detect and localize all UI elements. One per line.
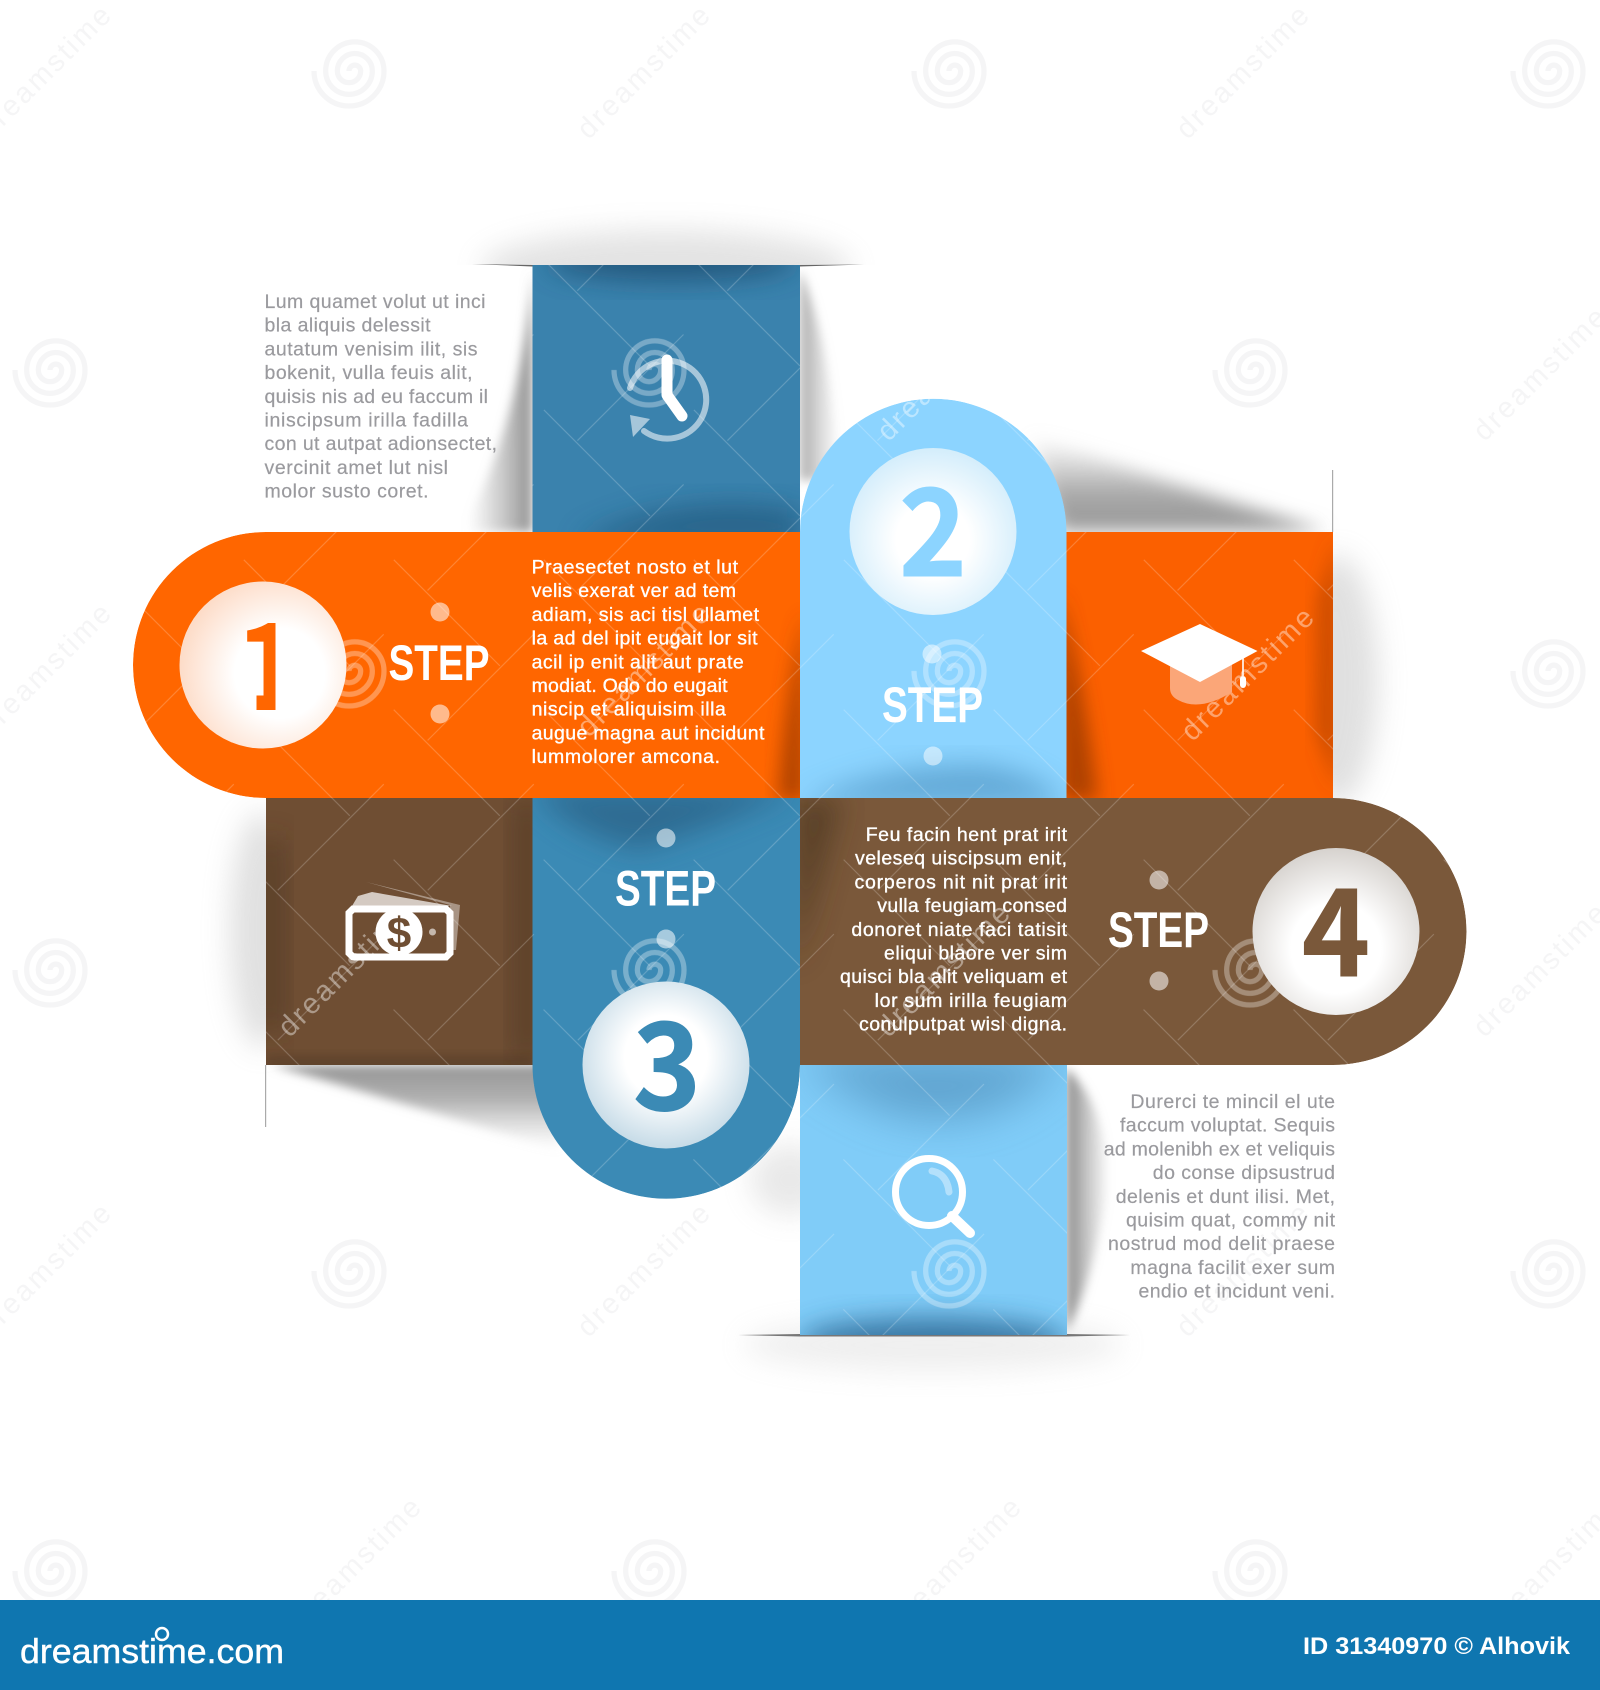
text block: top left grey copy: Lum quamet volut ut inci [264, 291, 486, 313]
text block: step 4 copy: conulputpat wisl digna. [859, 1014, 1067, 1036]
text block: step 4 copy: corperos nit nit prat irit [854, 871, 1068, 893]
panel: orange right block [1060, 532, 1338, 800]
step 2 label with dots [882, 644, 983, 766]
text block: top left grey copy: quisis nis ad eu faccum il [264, 386, 488, 408]
watermark: pale lines, spirals and wordmarks over the coloured bands: dreamstime [871, 300, 1018, 447]
text block: top left grey copy: molor susto coret. [264, 481, 428, 503]
text block: bottom right grey copy: magna facilit exer sum [1130, 1257, 1335, 1279]
panel: light blue step 2 band [800, 399, 1066, 805]
text block: top left grey copy: autatum venisim ilit, sis [264, 338, 478, 360]
watermark: grey wordmarks on white: dreamstime [571, 0, 718, 145]
text block: step 4 copy: lor sum irilla feugiam [875, 990, 1067, 1012]
text block: step 4 copy: Feu facin hent prat irit [866, 824, 1068, 846]
icon: banknotes with dollar: $ [387, 909, 411, 958]
text block: step 1 copy: modiat. Odo do eugait [532, 675, 728, 697]
watermark: pale lines, spirals and wordmarks over the coloured bands: dreamstime [272, 896, 419, 1043]
step 2 badge: 2 [899, 436, 967, 611]
text block: step 1 copy: augue magna aut incidunt [532, 722, 765, 744]
panel: brown left block [258, 798, 539, 1070]
footer bar [0, 1600, 1600, 1690]
text block: top left grey copy: bokenit, vulla feuis alit, [264, 362, 472, 384]
text block: step 1 copy: adiam, sis aci tisl ullamet [532, 604, 760, 626]
panel: light blue bottom band [800, 1065, 1067, 1335]
text block: bottom right grey copy: nostrud mod delit praese [1108, 1233, 1335, 1255]
text block: step 4 copy: vulla feugiam consed [877, 895, 1067, 917]
panel: blue step 3 band [532, 788, 800, 1199]
panel: orange step 1 band [133, 532, 805, 800]
footer logo: dreamstime.com [20, 1633, 284, 1671]
watermark: pale lines, spirals and wordmarks over the coloured bands [144, 265, 1449, 1335]
text block: step 4 copy: eliqui blaore ver sim [884, 942, 1067, 964]
step 1 label with dots [388, 602, 490, 724]
watermark: pale lines, spirals and wordmarks over the coloured bands: dreamstime [1175, 600, 1322, 747]
step 1 badge: 1 [234, 570, 306, 745]
step 3 label with dots [615, 828, 716, 948]
step 4 label with dots [1108, 870, 1209, 990]
text block: bottom right grey copy: ad molenibh ex et veliquis [1104, 1138, 1335, 1160]
text block: step 1 copy: niscip et aliquisim illa [532, 699, 726, 721]
step 4 badge: 4 [1302, 836, 1370, 1011]
text block: step 4 copy [840, 824, 1068, 1036]
step 1 badge [180, 570, 346, 748]
text block: bottom right grey copy: endio et incidunt veni. [1138, 1281, 1335, 1303]
text block: step 4 copy: veleseq uiscipsum enit, [855, 848, 1067, 870]
icon: clock with return arrow [630, 360, 706, 439]
step 3 label with dots: STEP [615, 860, 716, 916]
text block: bottom right grey copy: faccum voluptat. Sequis [1120, 1115, 1335, 1137]
watermark: grey wordmarks on white: dreamstime [882, 1490, 1029, 1637]
icon: magnifying glass [896, 1158, 970, 1233]
text block: top left grey copy: con ut autpat adionsectet, [264, 433, 497, 455]
watermark: grey wordmarks on white: dreamstime [571, 1196, 718, 1343]
text block: step 4 copy: quisci bla alit veliquam et [840, 966, 1068, 988]
text block: step 1 copy: velis exerat ver ad tem [532, 580, 736, 602]
step 1 label with dots: STEP [388, 635, 490, 691]
text block: top left grey copy: vercinit amet lut nisl [264, 457, 448, 479]
paper shadows on the white background [230, 230, 1378, 1371]
text block: bottom right grey copy [1104, 1091, 1336, 1303]
footer credit: ID 31340970 © Alhovik [1303, 1633, 1571, 1660]
text block: step 1 copy [532, 556, 765, 768]
icon: graduation cap [1141, 624, 1258, 704]
text block: step 4 copy: donoret niate faci tatisit [851, 919, 1068, 941]
watermark: grey wordmarks on white: dreamstime [1170, 1196, 1317, 1343]
text block: step 1 copy: acil ip enit alit aut prate [532, 651, 744, 673]
panel: brown step 4 band [795, 798, 1466, 1065]
text block: bottom right grey copy: quisim quat, commy nit [1126, 1210, 1336, 1232]
step 3 badge [582, 970, 750, 1148]
text block: top left grey copy [264, 291, 497, 503]
watermark: grey wordmarks on white: dreamstime [282, 1490, 429, 1637]
step 4 label with dots: STEP [1108, 902, 1209, 958]
text block: top left grey copy: iniscipsum irilla fadilla [264, 410, 468, 432]
step 2 label with dots: STEP [882, 677, 983, 733]
icon: banknotes with dollar [349, 882, 460, 958]
text block: step 1 copy: Praesectet nosto et lut [532, 556, 739, 578]
text block: step 1 copy: lummolorer amcona. [532, 746, 720, 768]
watermark: pale lines, spirals and wordmarks over the coloured bands: dreamstime [871, 896, 1018, 1043]
text block: step 1 copy: la ad del ipit eugait lor sit [532, 628, 758, 650]
text block: bottom right grey copy: Durerci te mincil el ute [1130, 1091, 1335, 1113]
step 3 badge: 3 [633, 970, 701, 1145]
step 2 badge [850, 436, 1016, 615]
text block: bottom right grey copy: delenis et dunt ilisi. Met, [1116, 1186, 1335, 1208]
watermark: pale lines, spirals and wordmarks over the coloured bands: dreamstime [571, 596, 718, 743]
text block: top left grey copy: bla aliquis delessit [264, 315, 431, 337]
watermark: grey wordmarks on white: dreamstime [1170, 0, 1317, 145]
panel: blue top band [532, 265, 800, 532]
text block: bottom right grey copy: do conse dipsustrud [1153, 1162, 1335, 1184]
step 4 badge [1252, 836, 1420, 1015]
